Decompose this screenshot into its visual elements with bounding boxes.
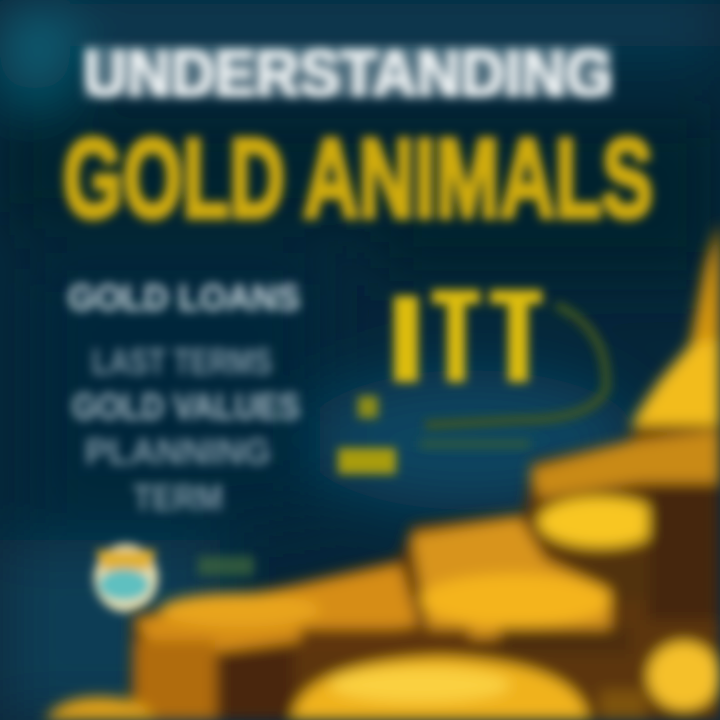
text line four: TERM xyxy=(133,477,223,518)
left text block xyxy=(68,277,300,518)
chart bars xyxy=(394,290,542,382)
icon: badge xyxy=(94,544,254,612)
heading: gold loans: GOLD LOANS xyxy=(68,277,300,318)
gold coin pile xyxy=(45,220,720,720)
bottom coins xyxy=(292,657,588,720)
right dark side xyxy=(648,485,720,620)
chart: yellow bars xyxy=(338,290,606,474)
chart arc xyxy=(425,305,606,425)
right stack upper slab xyxy=(530,430,720,498)
text line two: GOLD VALUES xyxy=(72,386,300,427)
text line one: LAST TERMS xyxy=(92,341,272,382)
dark gap xyxy=(300,628,470,656)
middle stack xyxy=(412,518,610,640)
chart ticks xyxy=(338,396,530,474)
title: understanding: UNDERSTANDING xyxy=(83,36,613,110)
peak slabs xyxy=(690,225,720,350)
left stack xyxy=(135,565,418,660)
text line three: PLANNING xyxy=(85,431,271,472)
pile base silhouette xyxy=(45,220,720,720)
right stack bright face xyxy=(538,497,662,547)
